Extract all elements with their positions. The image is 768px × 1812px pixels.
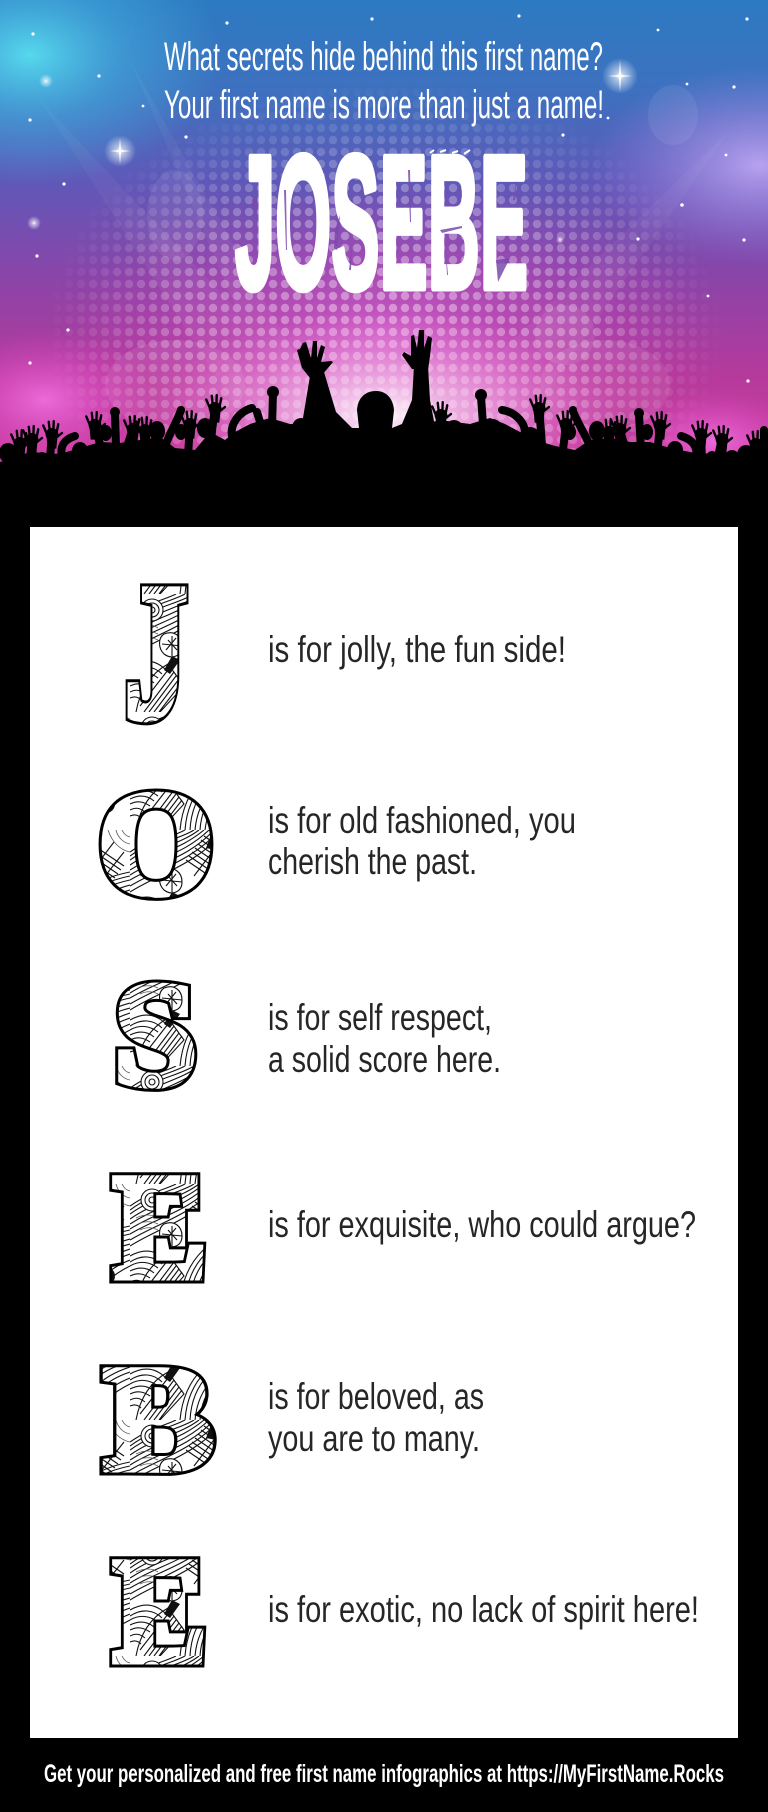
crowd silhouette [0, 330, 768, 530]
row: O [99, 764, 576, 924]
decorated letter E: E [114, 1145, 206, 1308]
description O: cherish the past. [268, 841, 477, 882]
header: concert stage background [0, 0, 768, 462]
raised hands of central pair [297, 341, 333, 378]
stage glow and smoke [105, 85, 698, 520]
decorated letter B: B [105, 1337, 213, 1500]
decorated letter E: E [114, 1145, 206, 1308]
sparkles [27, 14, 750, 383]
description J: is for jolly, the fun side! [268, 629, 566, 670]
decorated letter S: S [115, 955, 196, 1115]
decorated letter S: S [115, 955, 196, 1115]
small hands [206, 395, 225, 422]
raised arms [8, 392, 764, 470]
description O: is for old fashioned, you [268, 800, 576, 841]
dot matrix screen [66, 100, 702, 450]
heading: tagline [164, 35, 604, 127]
decorated letter E: E [114, 1529, 206, 1692]
decorated letter E: E [114, 1529, 206, 1692]
row: E [114, 1145, 696, 1308]
row: E second [114, 1529, 699, 1692]
decorated letter J [125, 547, 187, 758]
heads [0, 386, 755, 466]
description S: is for self respect, [268, 997, 492, 1038]
decorated letter B: B [105, 1337, 213, 1500]
description B: is for beloved, as [268, 1376, 484, 1417]
decorated letter J: J [125, 547, 187, 758]
row: B [105, 1337, 484, 1500]
description B [268, 1376, 484, 1459]
description O [268, 800, 576, 882]
panel: letters [30, 527, 738, 1738]
title: name JOSEBE [235, 117, 528, 329]
description S [268, 997, 501, 1080]
decorated letter J: J [125, 547, 187, 758]
description B: you are to many. [268, 1418, 480, 1459]
description S: a solid score here. [268, 1039, 501, 1080]
decorated letter O: O [99, 764, 213, 924]
central figure [296, 366, 442, 460]
crowd base mass [0, 418, 768, 530]
row: J [125, 547, 566, 758]
row: S [115, 955, 501, 1115]
decorated letter O: O [99, 764, 213, 924]
light beams [40, 60, 730, 430]
